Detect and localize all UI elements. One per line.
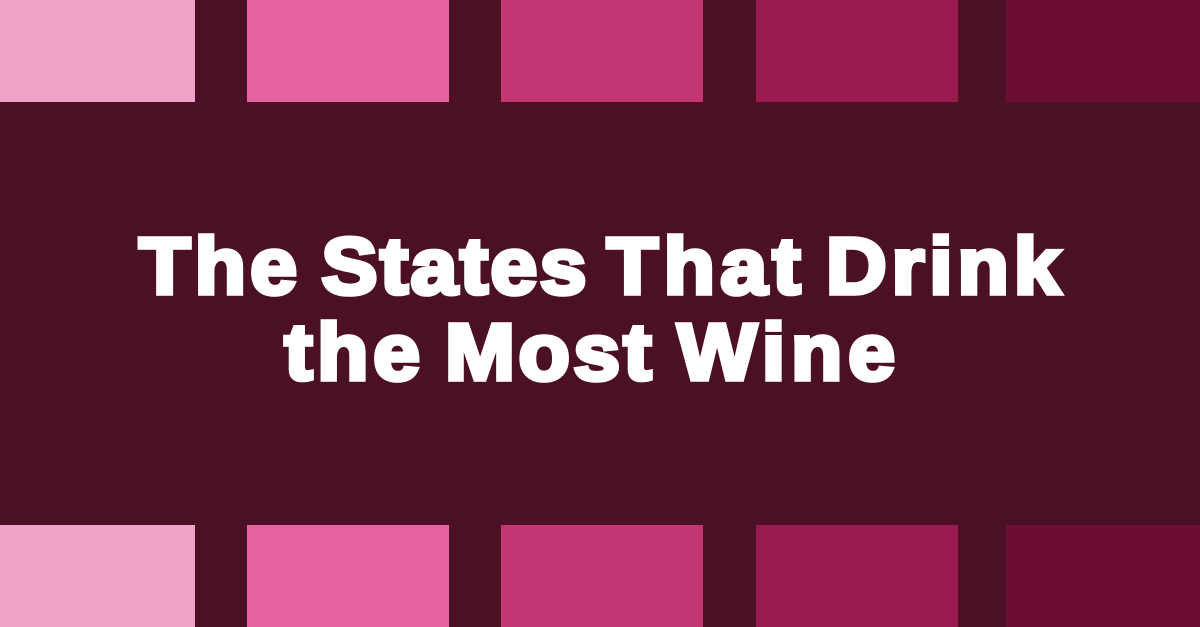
swatch: crimson: [756, 525, 958, 627]
title line 2: the: [284, 308, 420, 397]
title line 1: [139, 222, 1061, 311]
title line 1: Drink: [826, 222, 1061, 311]
bottom colour band: [0, 525, 1200, 627]
title: [139, 222, 1061, 397]
title line 2: [284, 308, 895, 397]
title line 2: Wine: [678, 308, 895, 397]
swatch: rose: [501, 525, 703, 627]
swatch: crimson: [756, 0, 958, 102]
swatch: burgundy: [1006, 525, 1200, 627]
swatch: pink: [247, 0, 449, 102]
title line 2: Most: [445, 308, 652, 397]
swatch: light pink: [0, 525, 195, 627]
swatch: light pink: [0, 0, 195, 102]
title line 1: The: [139, 222, 297, 311]
title line 1: States: [322, 222, 587, 311]
title line 1: That: [607, 222, 801, 311]
swatch: rose: [501, 0, 703, 102]
swatch: pink: [247, 525, 449, 627]
swatch: burgundy: [1006, 0, 1200, 102]
top colour band: [0, 0, 1200, 102]
